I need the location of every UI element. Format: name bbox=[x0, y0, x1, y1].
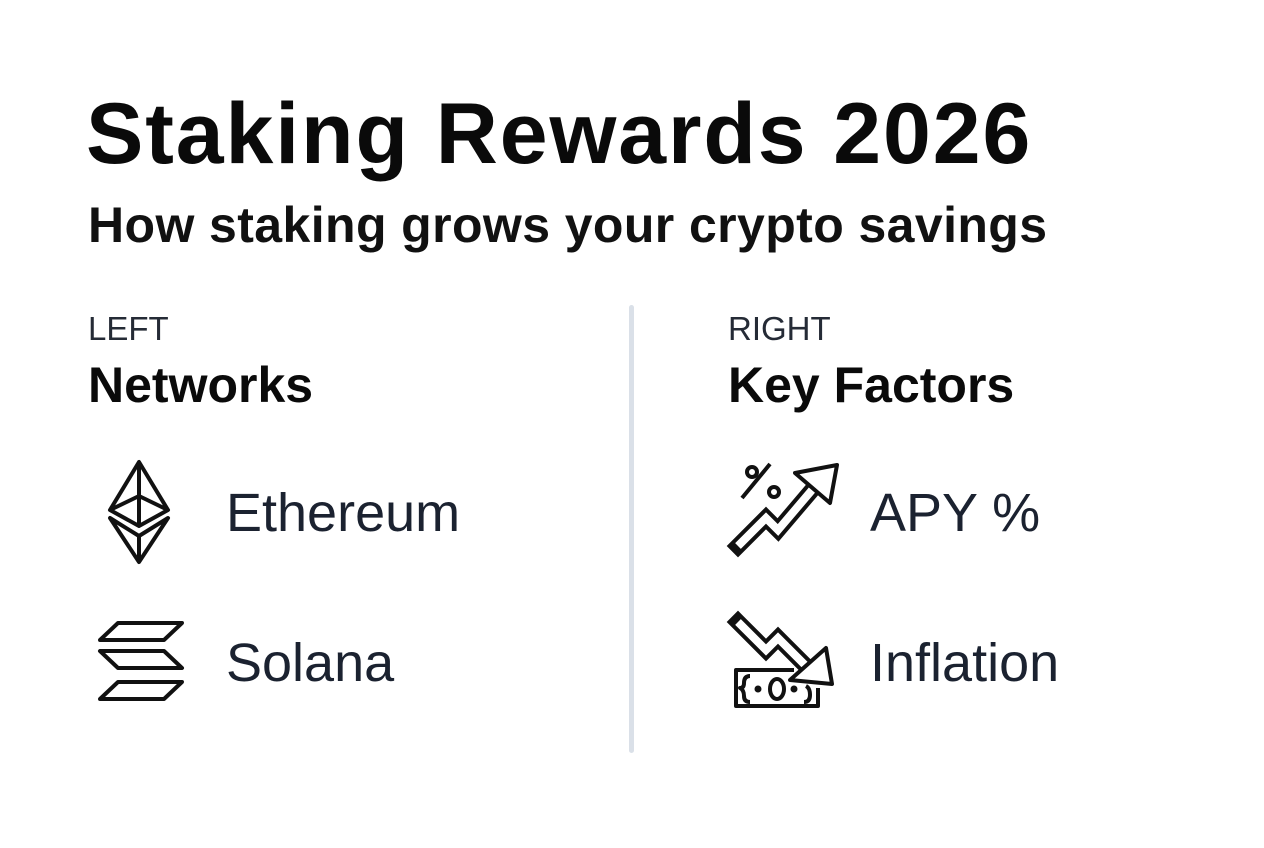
text: apy: APY % bbox=[870, 483, 1040, 543]
heading: key factors: Key Factors bbox=[728, 357, 1014, 413]
label: right: RIGHT bbox=[728, 310, 831, 347]
icon: ethereum bbox=[108, 460, 170, 564]
panel: key factors bbox=[726, 310, 1059, 708]
divider bbox=[629, 305, 634, 753]
icon: apy growth arrow bbox=[726, 462, 839, 558]
subtitle: How staking grows your crypto savings bbox=[88, 197, 1047, 253]
icon: solana bbox=[98, 621, 184, 701]
panel: networks bbox=[88, 310, 460, 701]
title: Staking Rewards 2026 bbox=[86, 86, 1032, 182]
text: inflation: Inflation bbox=[870, 633, 1059, 693]
label: left: LEFT bbox=[88, 310, 169, 347]
text: solana: Solana bbox=[226, 633, 394, 693]
heading: networks: Networks bbox=[88, 357, 313, 413]
icon: inflation bbox=[726, 610, 834, 708]
text: ethereum: Ethereum bbox=[226, 483, 460, 543]
